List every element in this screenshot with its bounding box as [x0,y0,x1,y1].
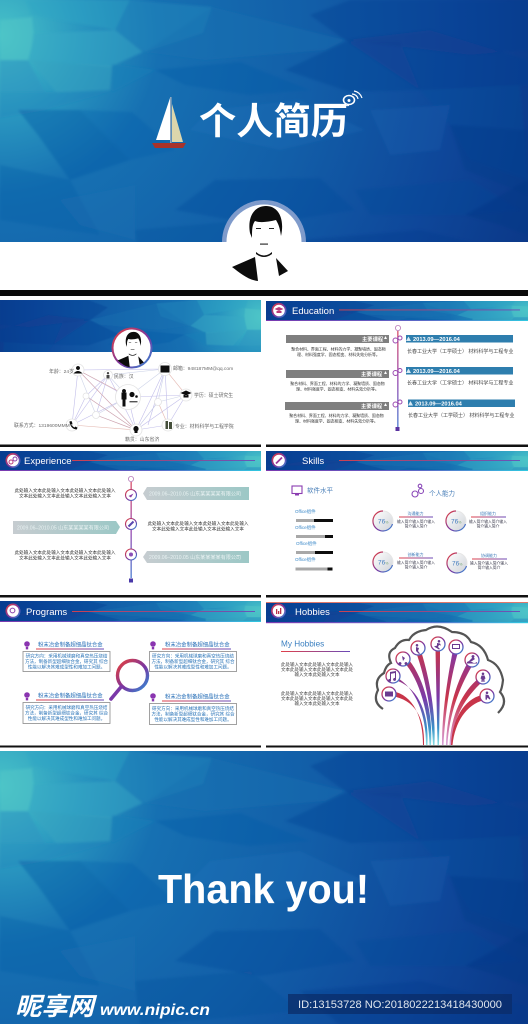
hobby glyphs [385,640,490,700]
experience entries: 此处输入文本此处输入文本此处输入文本此处输入 [147,520,249,527]
hobbies header [266,602,528,678]
program descriptions: 研究方向：采用机械球磨和真空热压烧结 [26,652,108,660]
software skills [292,486,334,570]
hobbies text [281,640,353,707]
slide divider [0,444,261,447]
tree branches [392,648,484,745]
icon: magnifying glass [111,660,148,699]
education entries [285,335,515,424]
experience entries: 文本此处输入文本此处输入文本此处输入文本 [152,526,244,532]
network labels: 年龄：24岁 [49,368,74,375]
abilities heading: 个人能力 [429,488,455,498]
program descriptions: 研究方向：采用机械球磨和真空热压烧结 [152,652,234,660]
network labels: 学历：硕士研究生 [194,392,233,399]
hobbies description: 此处输入文本此处输入文本此处输入 [281,661,353,668]
hobby icons [382,637,494,703]
experience entries: 此处输入文本此处输入文本此处输入文本此处输入 [14,549,116,556]
icons: light bulbs [24,641,156,701]
ability descriptions: 简介输入简介 [405,524,428,528]
program titles: 粉末冶金制备超细晶钛合金 [38,692,103,700]
experience entries: 文本此处输入文本此处输入文本此处输入文本 [19,554,111,562]
education header [266,301,528,375]
ability descriptions: 创新能力 [408,551,424,557]
watermark logo [15,993,210,1021]
education entries: 长春工业大学（工学硕士） 材料科学与工程专业 [407,348,513,355]
program titles [38,640,230,700]
education entries: 主要课程 [361,370,383,378]
ability descriptions: 简介输入简介 [477,524,500,528]
education entries: 理、材料强度学、固态相变、材料失效分析等。 [295,418,378,424]
experience header: Experience [24,456,72,467]
icon: gears [412,484,424,497]
programs header: Programs [26,607,67,618]
panel: experience [0,451,261,598]
hobbies description: 文本此处输入文本此处输入文本此处 [281,666,353,673]
panel: thank you slide [0,751,528,1024]
program descriptions: 性能以解决其难成型性和难加工问题。 [28,715,105,722]
experience entries [13,487,249,563]
network labels: 邮箱：948187MM@qq.com [173,365,233,372]
network labels: 联系方式：1319600MMMT [14,422,73,429]
software bars: Office组件 [295,556,316,563]
education entries: 主要课程 [362,335,384,343]
ability descriptions [397,510,508,570]
education entries: 2013.09—2016.04 [415,401,463,407]
panel: education [266,301,528,447]
program descriptions: 方法，制备新型超细钛合金，研究其 综合 [151,710,235,718]
program descriptions [25,652,235,723]
education entries: 主要课程 [361,402,383,410]
program descriptions: 研究方向：采用机械球磨和真空热压烧结 [26,704,108,711]
hobbies description: 文本此处输入文本此处输入文本此处 [281,695,353,702]
program titles: 粉末冶金制备超细晶钛合金 [165,692,230,700]
hobbies description [281,661,353,707]
program descriptions: 性能以解决其难成型性和难加工问题。 [154,664,232,670]
portrait badge [222,200,306,281]
program descriptions: 性能以解决其难成型性和难加工问题。 [154,716,232,723]
program descriptions: 研究方向：采用机械球磨和真空热压烧结 [152,705,234,712]
panel: hobbies [266,602,528,748]
watermark id box [288,994,512,1014]
skills header [266,451,528,525]
hobbies description: 输入文本此处输入文本 [294,671,340,678]
ability dials: 76% [451,518,461,526]
experience entries: 文本此处输入文本此处输入文本此处输入文本 [19,492,111,500]
network labels [14,365,234,443]
education entries: 聚合材料、界面工程、材料的力学、凝聚墙质、固态物 [289,413,384,418]
portrait circle [112,328,152,368]
experience entries: 此处输入文本此处输入文本此处输入文本此处输入 [14,487,116,494]
program descriptions: 方法，制备新型超细钛合金，研究其 综合 [25,710,109,716]
skills header: Skills [302,456,324,467]
ability dials: 76% [378,518,388,526]
hobbies header: Hobbies [295,607,330,618]
software bars [295,508,333,570]
education timeline [393,325,402,431]
watermark id box: ID:13153728 NO:2018022213418430000 [298,999,502,1011]
network labels: 民族：汉 [114,373,134,380]
experience entries: 2009.06–2010.05 山东某某某某有限公司 [149,554,241,561]
watermark logo: www.nipic.cn [100,1002,210,1019]
cover polygon background [0,0,528,242]
slide divider [266,444,528,447]
experience entries: 2009.06–2010.05 山东某某某某有限公司 [149,490,241,498]
program descriptions: 性能以解决其难成型性和难加工问题。 [28,664,105,670]
program descriptions: 方法，制备新型超细钛合金，研究其 综合 [25,658,109,665]
education entries: 理、材料强度学、固态相变、材料失效分析等。 [297,352,380,357]
education entries: 2013.09—2016.04 [413,369,461,375]
hobbies description: 输入文本此处输入文本 [294,700,340,707]
node icons [70,366,192,433]
panel: skills [266,451,528,598]
hobbies heading: My Hobbies [281,640,324,648]
title: 个人简历 [199,101,348,142]
ability dials: 76% [378,560,388,566]
network labels: 籍贯：山东省济 [125,436,159,443]
ability descriptions: 简介输入简介 [405,564,428,570]
panel: programs [0,601,261,748]
cover divider bar [0,290,528,296]
network labels: 专业：材料科学与工程学院 [175,423,234,430]
hobbies description: 此处输入文本此处输入文本此处输入 [281,690,353,697]
education entries: 长春工业大学（工学硕士） 材料科学与工程专业 [408,412,514,419]
panel: cover slide [0,0,528,296]
software bars: Office组件 [296,540,317,547]
ability descriptions: 输入简介输入简介输入 [470,560,508,566]
ability dials [373,511,467,573]
info banner [0,300,261,352]
programs header [0,601,261,675]
experience timeline [126,476,136,582]
education header: Education [292,306,334,317]
program titles: 粉末冶金制备超细晶钛合金 [165,640,230,648]
tree canopy outline [376,626,504,713]
slide divider [266,595,528,598]
icon: monitor [292,486,302,496]
experience header [0,451,261,525]
hobby tree [376,626,504,745]
education entries: 长春工业大学（工学硕士） 材料科学与工程专业 [407,380,513,386]
program boxes [23,652,236,724]
network lines [72,369,186,430]
ability descriptions: 输入简介输入简介输入 [397,560,435,565]
program titles: 粉末冶金制备超细晶钛合金 [38,640,103,648]
software bars: Office组件 [295,524,316,531]
ability descriptions: 简介输入简介 [478,565,501,570]
ability descriptions: 协调能力 [481,552,497,558]
software bars: Office组件 [295,508,316,515]
ability dials: 76% [452,560,462,568]
watermark logo: 昵享网 [15,993,98,1021]
icon: sailboat [152,97,186,148]
slide divider [0,595,261,598]
software heading: 软件水平 [307,486,334,494]
education entries: 2013.09—2016.04 [413,337,461,343]
ability descriptions: 组织能力 [480,510,496,516]
education entries: 聚合材料、界面工程、材料的力学、凝聚墙质、固态物 [290,381,385,386]
personal abilities [373,484,508,573]
ability descriptions: 输入简介输入简介输入 [469,519,507,524]
program descriptions: 方法，制备新型超细钛合金，研究其 综合 [151,658,235,665]
thank you heading: Thank you! [158,866,369,912]
thank you polygon background [0,751,528,1024]
ability descriptions: 沟通能力 [408,510,424,516]
slide divider [0,746,261,748]
ability descriptions: 输入简介输入简介输入 [397,519,435,524]
education entries: 理、材料强度学、固态相变、材料失效分析等。 [296,386,379,392]
icon: weibo logo [344,91,362,106]
slide divider [266,746,528,748]
network nodes [66,362,192,436]
education entries: 聚合材料、界面工程、材料的力学、凝聚墙质、固态物 [291,346,386,352]
experience entries: 2009.06–2010.05 山东某某某某有限公司 [17,524,109,532]
programs boxes [23,640,236,724]
panel: basic info network [0,300,261,447]
